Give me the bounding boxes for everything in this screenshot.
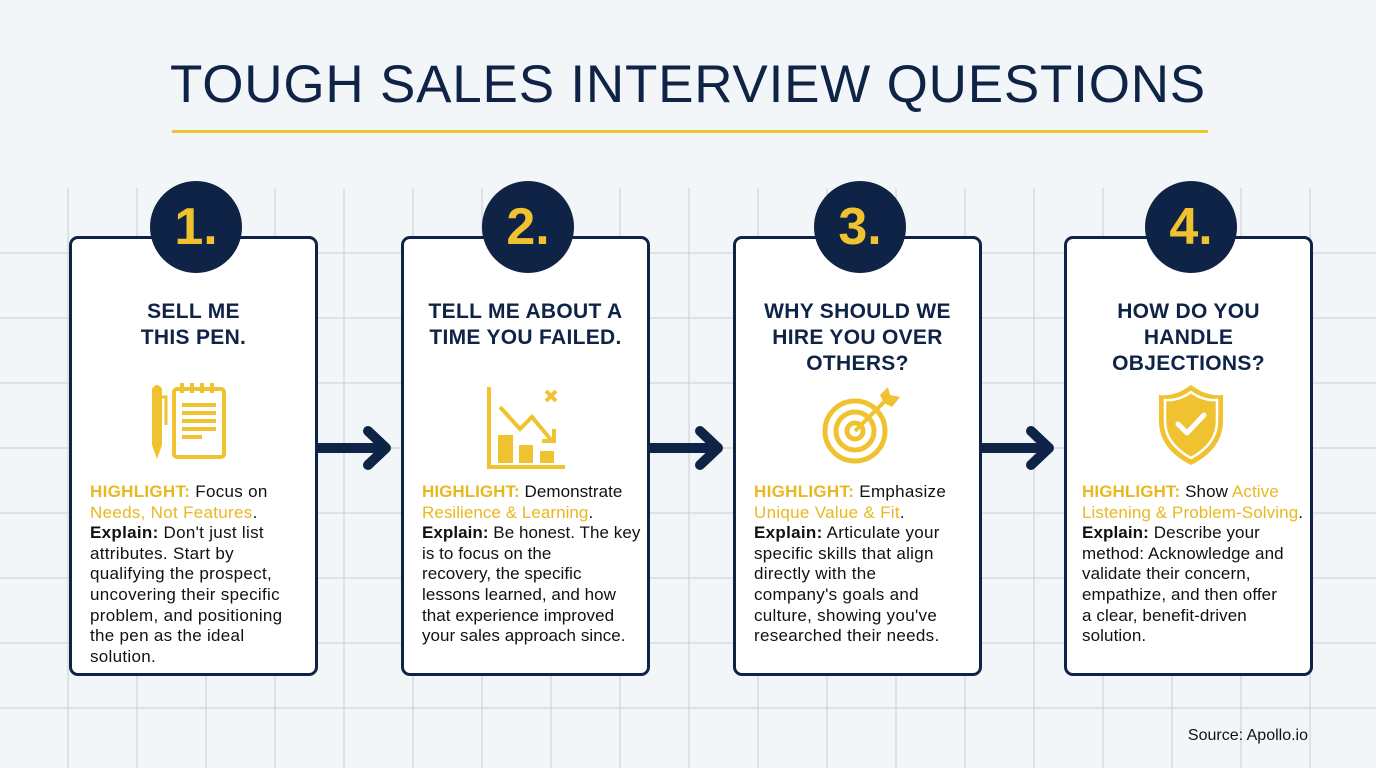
card 1: Explain: Don't just list: [90, 523, 264, 542]
card 1: attributes. Start by: [90, 544, 234, 563]
card 3: Unique Value & Fit.: [754, 503, 905, 522]
card 2: TIME YOU FAILED.: [429, 326, 622, 349]
card 3: HIGHLIGHT: Emphasize: [754, 482, 946, 501]
text: 1.: [174, 198, 218, 256]
icon: declining chart: [487, 387, 565, 469]
card 2: that experience improved: [422, 606, 614, 625]
card 4: a clear, benefit-driven: [1082, 606, 1247, 625]
card 1: problem, and positioning: [90, 606, 282, 625]
card 3: specific skills that align: [754, 544, 934, 563]
card 3: directly with the: [754, 564, 876, 583]
card 3: OTHERS?: [806, 352, 909, 375]
card 4: empathize, and then offer: [1082, 585, 1277, 604]
card 1: solution.: [90, 647, 156, 666]
card 3: company's goals and: [754, 585, 919, 604]
card 2: is to focus on the: [422, 544, 551, 563]
title: TOUGH SALES INTERVIEW QUESTIONS: [170, 55, 1206, 114]
card 4: Explain: Describe your: [1082, 523, 1260, 542]
card 1: THIS PEN.: [141, 326, 246, 349]
card 4: HIGHLIGHT: Show Active: [1082, 482, 1279, 501]
card 3: [733, 236, 982, 676]
card 1: SELL ME: [147, 300, 240, 323]
card 3: researched their needs.: [754, 626, 940, 645]
icon: shield with check: [1159, 385, 1223, 465]
icon: target: [822, 387, 900, 464]
card 2: lessons learned, and how: [422, 585, 616, 604]
text: 2.: [506, 198, 550, 256]
card 4: OBJECTIONS?: [1112, 352, 1265, 375]
arrow 3: [982, 426, 1054, 470]
card 1: the pen as the ideal: [90, 626, 244, 645]
arrow 2: [650, 426, 723, 470]
card 4: Listening & Problem-Solving.: [1082, 503, 1303, 522]
card 4: method: Acknowledge and: [1082, 544, 1284, 563]
text: 3.: [838, 198, 882, 256]
card 2: your sales approach since.: [422, 626, 626, 645]
card 1: uncovering their specific: [90, 585, 280, 604]
icon: pen and notepad: [152, 383, 226, 459]
card 3: Explain: Articulate your: [754, 523, 940, 542]
card 2: [401, 236, 650, 676]
card 4: [1064, 236, 1313, 676]
card 2: HIGHLIGHT: Demonstrate: [422, 482, 622, 501]
card 2: TELL ME ABOUT A: [429, 300, 622, 323]
card 2: recovery, the specific: [422, 564, 582, 583]
card 4: validate their concern,: [1082, 564, 1251, 583]
card 4: solution.: [1082, 626, 1146, 645]
card 1: HIGHLIGHT: Focus on: [90, 482, 268, 501]
card 3: culture, showing you've: [754, 606, 937, 625]
card 1: [69, 236, 318, 676]
card 2: Explain: Be honest. The key: [422, 523, 640, 542]
card 1: Needs, Not Features.: [90, 503, 258, 522]
arrow 1: [318, 426, 391, 470]
card 4: HOW DO YOU: [1117, 300, 1260, 323]
source: Source: Apollo.io: [1188, 727, 1308, 744]
card 2: Resilience & Learning.: [422, 503, 593, 522]
card 1: qualifying the prospect,: [90, 564, 272, 583]
text: 4.: [1169, 198, 1213, 256]
card 3: WHY SHOULD WE: [764, 300, 951, 323]
title underline: [172, 130, 1208, 133]
card 3: HIRE YOU OVER: [772, 326, 943, 349]
card 4: HANDLE: [1144, 326, 1233, 349]
